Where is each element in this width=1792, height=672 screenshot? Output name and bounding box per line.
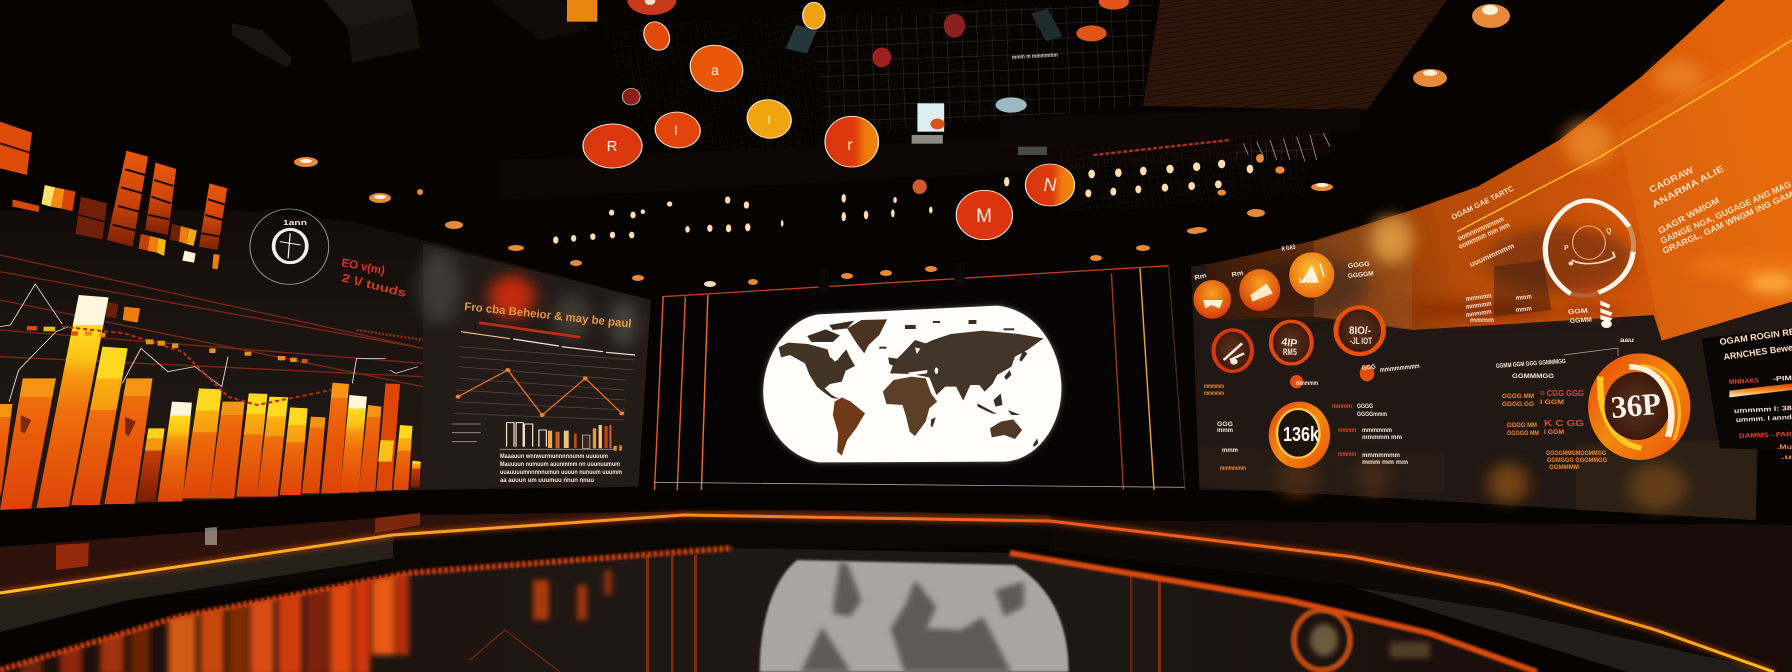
gauge notes: 136k: GGGG <box>1357 403 1373 410</box>
disc: dark red upper <box>872 47 891 67</box>
badge labels: RMS <box>1283 347 1297 357</box>
gauge notes: 136k: mmm mm mm <box>1362 459 1408 466</box>
value: 36P: 36P <box>1610 386 1662 425</box>
badge labels: -JL IOT <box>1350 336 1372 346</box>
continent: Arctic islands <box>807 320 1014 342</box>
gauge notes: 36P: GGMGGG GGGMMGG <box>1547 457 1607 464</box>
bar chart: large wall chart <box>0 255 423 510</box>
disc letters: l <box>675 123 678 138</box>
text blocks: orange panel copy: oomnmmmmmm <box>1456 214 1506 243</box>
gauge notes: 136k: mmmmmm <box>1362 427 1392 434</box>
gauge notes: 136k: mmmmm <box>1204 390 1224 397</box>
badge labels: 4IP <box>1281 336 1298 350</box>
text: dial value note <box>340 257 407 300</box>
panel: black data box <box>1702 328 1792 450</box>
badge labels: Rm <box>1231 270 1244 279</box>
text block: black data box: -PIM <box>1773 375 1792 383</box>
disc letters: a <box>711 62 719 78</box>
stage edge and floor <box>0 490 1792 672</box>
gauge notes: 136k: mmmmm <box>1296 380 1318 387</box>
text blocks: orange panel copy: GAGR WMIGM <box>1656 195 1721 236</box>
heading: line chart board title: Fro cba Beheior & may be paul <box>464 301 632 331</box>
line glow <box>0 515 1774 672</box>
text block: gauge side notes: mmm <box>1515 305 1532 314</box>
map reflection <box>760 560 1069 672</box>
disc: N <box>1025 164 1075 206</box>
gauge: 36P <box>1588 353 1690 460</box>
ceiling structure <box>232 0 1447 215</box>
disc letters: N <box>1044 175 1058 195</box>
icon: coin dial with label <box>250 209 329 284</box>
gauge notes: 136k: mmmm <box>1338 451 1356 458</box>
badge labels: R GAS <box>1281 244 1297 253</box>
panel: right curved display wall <box>1191 0 1792 520</box>
text blocks: orange panel copy: OGAM GAE TARTC <box>1450 184 1516 222</box>
badge labels: 8IO/- <box>1349 325 1371 337</box>
gauge: 136k <box>1269 402 1330 468</box>
disc letters: I <box>767 113 771 127</box>
glowing floor edge reflections <box>0 548 1537 672</box>
text block: gauge side notes <box>1465 292 1634 344</box>
text block: gauge side notes: GGMM <box>1570 316 1592 325</box>
ceiling lamps <box>294 4 1510 287</box>
gauge notes: 36P: GGGG MM <box>1502 393 1534 400</box>
text block: black data box: .u <box>1781 454 1792 461</box>
gauge notes: 36P: GGGGG MM <box>1507 430 1539 437</box>
text blocks: orange panel copy: GRARGL, GAM WNGM ING GAM <box>1661 189 1792 256</box>
gauge notes: 36P: GGMMMM <box>1549 464 1579 471</box>
text block: gauge side notes: mmmmm <box>1465 308 1492 319</box>
map glow <box>763 306 1061 462</box>
continent: Africa <box>883 377 937 436</box>
badge labels: L4L <box>1299 278 1317 285</box>
label: dial caption: 1ann <box>283 220 307 227</box>
gauge notes: 36P: I GGM <box>1540 399 1564 406</box>
text block: board caption: uuauuuumnnnnnumun uuuun nunuum uuumm <box>500 469 622 476</box>
gauge notes: 136k: GGGGmmm <box>1357 411 1387 418</box>
text blocks: orange panel copy: GAINGE NGA, GUGAGE ANG MAG <box>1659 179 1792 246</box>
gauge notes: 36P: GGGG MM <box>1507 422 1537 429</box>
text block: board caption: Maaauun wnnwurmunnnnnunm uuuuum <box>500 453 608 460</box>
continent: South America <box>833 397 865 456</box>
text blocks: orange panel copy: ANARMA ALIE <box>1650 163 1726 210</box>
gauge notes: 36P: GGGG GG <box>1502 401 1534 408</box>
disc: M <box>956 190 1013 240</box>
glowing stage line <box>0 515 1774 672</box>
chart: world map <box>763 306 1061 462</box>
disc: red l <box>649 108 706 152</box>
panel: equalizer blocks <box>0 122 227 323</box>
gauge notes: 136k: mmmm <box>1338 427 1356 434</box>
continent: North America <box>779 343 855 399</box>
gauge notes: 36P: K C GG <box>1544 419 1584 428</box>
gauge notes: 136k <box>1204 363 1420 472</box>
text block: board caption <box>500 453 622 484</box>
gauge notes: 136k: GGG <box>1361 364 1376 372</box>
text block: gauge side notes: mmm <box>1515 293 1532 302</box>
disc: gradient r <box>825 116 879 167</box>
text block: black data box: MNNAKS <box>1729 377 1760 386</box>
disc: yellow I <box>743 97 795 141</box>
text block: black data box: ummmm I: 38 <box>1734 405 1792 415</box>
badge labels: GGGG <box>1347 261 1370 270</box>
yellow accent line <box>1457 40 1792 232</box>
text block: gauge side notes: mmmm <box>1470 317 1494 324</box>
continent: Eurasia <box>890 331 1044 401</box>
text block: black data box <box>1719 327 1792 461</box>
disc: small top orange <box>575 2 1075 240</box>
text blocks: orange panel copy <box>1450 163 1792 269</box>
gauge notes: 36P: GGMMMGG <box>1512 373 1554 380</box>
gauge notes: 136k: mmm <box>1222 447 1238 454</box>
badge labels: GGGGM <box>1347 270 1374 280</box>
gauge notes: 36P: GGMM GGM GGG GGMMMGG <box>1496 358 1566 370</box>
wall spotlights <box>419 250 636 347</box>
disc: orange a <box>684 41 749 96</box>
gauge notes: 136k: mmm <box>1217 427 1233 434</box>
disc letters: r <box>847 137 853 154</box>
text blocks: orange panel copy: oommmm mm mm <box>1457 220 1511 251</box>
text block: gauge side notes: mmmmm <box>1465 300 1492 311</box>
text block: black data box: .Mu <box>1777 444 1792 451</box>
labels: gauge letters: P <box>1564 245 1569 252</box>
icon badges: upper row <box>1193 252 1334 319</box>
continent: Greenland <box>847 319 887 353</box>
icon badges: lower row <box>1213 307 1383 388</box>
gauge notes: 136k: mmmmm mm <box>1362 434 1402 441</box>
gauge notes: 36P: I GGM <box>1544 429 1564 436</box>
disc: red R <box>575 118 650 174</box>
gauge notes: 136k: mmmmm <box>1204 383 1224 390</box>
gauge notes: 136k: GGG <box>1217 421 1233 428</box>
text block: gauge side notes: GGM <box>1568 308 1588 316</box>
disc letters <box>607 62 1058 227</box>
floor reflections <box>20 545 1430 672</box>
value: 136k: 136k <box>1283 424 1320 446</box>
text block: board caption: Mauuuun numuum auunmmm nn uuunuumum <box>500 461 620 468</box>
gauge notes: 36P <box>1496 348 1618 471</box>
disc: small dark red <box>622 88 640 105</box>
badge labels: Rm <box>1194 272 1207 282</box>
gauge notes: 136k: mmmmmmm <box>1362 452 1400 459</box>
panel: centre stage frame <box>651 263 1186 522</box>
text block: black data box: ARNCHES Bewe <box>1723 342 1792 362</box>
gauge notes: 136k: mmmmmm <box>1220 465 1246 472</box>
gauge notes: 36P: = CGG GGG <box>1540 389 1584 398</box>
text block: gauge side notes: aau <box>1620 337 1634 344</box>
disc: yellow top <box>803 2 825 29</box>
left wall <box>0 210 651 520</box>
hanging discs <box>567 0 1129 240</box>
labels: gauge letters: Q <box>1606 228 1612 235</box>
gauge notes: 136k: mmmmmmmm <box>1379 363 1420 374</box>
text block: gauge side notes: mmmmm <box>1465 292 1492 303</box>
line chart: orange zigzag <box>458 370 622 415</box>
badge labels <box>1194 244 1374 357</box>
continent: Australia <box>990 419 1022 439</box>
labels: gauge letters <box>1564 228 1612 252</box>
text blocks: orange panel copy: CAGRAW <box>1647 165 1696 195</box>
text block: black data box: ummm. I annd <box>1736 414 1792 424</box>
disc letters: R <box>607 138 618 155</box>
text: dial value note: 2 \/ tuuds <box>340 272 407 300</box>
line chart overlays <box>0 284 418 402</box>
map details <box>879 347 1038 447</box>
text block: black data box: DAMMS - PAR <box>1739 431 1792 440</box>
light rows <box>553 133 1330 244</box>
gauge notes: 136k: mmmm <box>1332 403 1352 410</box>
ceiling caption strip: mmm m mmmmmm <box>1012 53 1058 61</box>
text blocks: orange panel copy: uuummmmm <box>1468 241 1516 269</box>
text: dial value note: EO v(m) <box>340 257 386 277</box>
gauge notes: 36P: GGGGMMGMGGMMGG <box>1546 450 1606 457</box>
text block: board caption: aa auuun um uuumuu nnun nnuu <box>500 477 594 484</box>
disc: dark red mesh <box>944 14 965 38</box>
gauge reflection <box>1294 610 1430 670</box>
bar chart: mini columns <box>452 423 622 451</box>
gauge: white ring magnifier <box>1545 201 1634 328</box>
panel: line chart board <box>452 323 635 451</box>
disc letters: M <box>976 206 992 227</box>
